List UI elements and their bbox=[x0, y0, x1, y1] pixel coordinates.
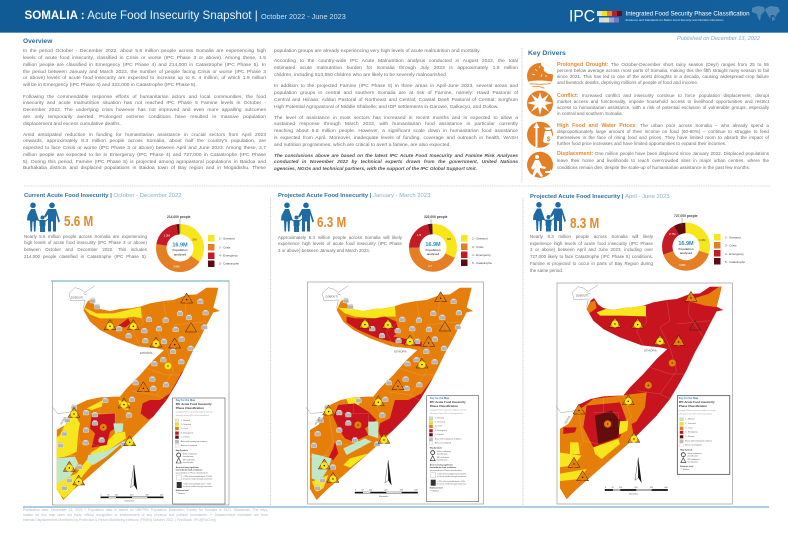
donut chart: current: 4 - Emergency bbox=[219, 254, 238, 258]
donut chart: current: 5M bbox=[192, 238, 197, 242]
map legend: january-march: of caloric needs through assistance bbox=[437, 475, 466, 478]
map legend: current: 4 - Emergency bbox=[181, 432, 193, 434]
overview paragraph 6: In addition to the projected Famine (IPC Phase 5) in three areas in April-June 2023, several areas and bbox=[274, 84, 518, 89]
map legend: january-march: Areas not analysed bbox=[435, 442, 451, 445]
donut chart: january-march bbox=[414, 215, 492, 268]
icon: drought bbox=[527, 63, 553, 89]
donut chart: current: 3.8M bbox=[173, 264, 180, 268]
overview paragraph 3: Amid anticipated reduction in funding for humanitarian assistance in crucial sectors from April 2023 bbox=[23, 133, 266, 138]
map legend: current: IDP settlement bbox=[183, 458, 196, 462]
map legend: april-june: IPC Acute Food Insecurity bbox=[679, 400, 715, 404]
overview conclusions bbox=[274, 154, 518, 172]
donut chart: april-june: 5 - Catastrophe bbox=[725, 260, 745, 264]
donut chart: april-june: 4.8M bbox=[679, 263, 686, 267]
donut chart: april-june bbox=[667, 214, 745, 267]
donut chart: january-march: 2 - Stressed bbox=[472, 236, 488, 240]
map legend: current: Key for the Map bbox=[176, 398, 196, 402]
map legend: april-june: (mapped Phase represents highest severity bbox=[679, 409, 715, 412]
map legend: april-june: classification bbox=[687, 455, 698, 458]
map legend: current: 2 - Stressed bbox=[181, 423, 191, 426]
map: january-march: DJIBOUTI bbox=[326, 295, 338, 299]
map legend: current: *** Medium bbox=[176, 493, 186, 495]
map legend: april-june: affecting at least 20% of the population) bbox=[679, 413, 712, 416]
donut chart: current bbox=[161, 215, 239, 268]
driver: conflict text: access to humanitarian assistance, with a risk of potential exclusion of vulnerable groups, especially bbox=[557, 105, 769, 110]
map legend: january-march: Evidence level bbox=[430, 488, 443, 490]
donut chart: january-march: 8M bbox=[447, 237, 452, 241]
map legend: january-march: (accounted for in Phase classification) bbox=[430, 469, 462, 472]
donut chart: january-march: Population bbox=[426, 248, 441, 252]
donut chart: january-march: 4.7 bbox=[428, 264, 432, 268]
map legend: april-june: Key for the Map bbox=[679, 396, 699, 400]
overview paragraph 1: or above) levels of acute food insecurity are expected to increase up to 6. 4 million, of which 1.9 million bbox=[23, 76, 266, 81]
map: april-june: DJIBOUTI bbox=[576, 294, 588, 298]
panel text: current: high levels of acute food insecurity (IPC Phase 3 or above) bbox=[24, 240, 147, 245]
panel text: current: between October and December 2022. This includes bbox=[24, 247, 147, 252]
map legend: january-march: of caloric needs through assistance bbox=[437, 483, 466, 486]
donut chart: january-march: 5 - Catastrophe bbox=[472, 261, 492, 265]
map legend: current: Phase Classification bbox=[176, 406, 204, 410]
driver: conflict text: market access and functionality, impede household access to livelihood opportunities and restrict bbox=[557, 99, 769, 104]
panel text: current bbox=[24, 234, 147, 259]
driver: prolonged drought text: and livestock deaths, depriving millions of people of food and income. bbox=[557, 80, 698, 85]
overview paragraph 1 bbox=[23, 48, 266, 88]
panel text: april-june: Nearly 8.3 million people across Somalia will likely bbox=[530, 234, 653, 239]
driver: prolonged drought text: Prolonged Drought: The October-December short rainy season (Deyr) ranges from 25 to 55 bbox=[557, 62, 769, 68]
IPC logo bbox=[569, 6, 780, 26]
map legend: april-june: 3 - Crisis bbox=[685, 427, 693, 430]
map legend: january-march: > 25% of households meet > 50% bbox=[437, 480, 465, 483]
map legend: current: of caloric needs through assistance bbox=[183, 485, 212, 488]
panel text: current: Nearly 5.6 million people across Somalia are experiencing bbox=[24, 234, 147, 238]
donut chart: april-june: 3 - Crisis bbox=[725, 244, 737, 248]
driver: conflict text: in central and southern Somalia. bbox=[557, 111, 623, 116]
overview conclusions: agencies, NGOs and technical partners, with the support of the IPC Global Support Unit. bbox=[274, 167, 477, 172]
overview paragraph 2: displacement and excess cumulative deaths. bbox=[23, 122, 121, 127]
overview paragraph 6: population groups in central and southern Somalia are at risk of Famine, namely: Hawd Pastoral of bbox=[274, 91, 518, 96]
donut chart: current: 2 - Stressed bbox=[219, 236, 235, 240]
donut chart: april-june: Population bbox=[679, 247, 694, 251]
panel text: april-june: 3 or above) between April and June 2023, including over bbox=[530, 247, 653, 252]
donut chart: current: 16.9M bbox=[172, 242, 188, 248]
donut chart: january-march: 4 - Emergency bbox=[472, 253, 491, 257]
IPC logo: Evidence and Standards for Better Food Security and Nutrition Decisions bbox=[626, 18, 724, 22]
footer rule bbox=[23, 506, 769, 508]
IPC logo: Integrated Food Security Phase Classification bbox=[626, 12, 750, 18]
map legend: april-june: Evidence level bbox=[680, 466, 694, 468]
icon: prices bbox=[527, 122, 554, 148]
map legend: current: Areas not analysed bbox=[181, 444, 197, 447]
overview paragraph 6: High Potential Agropastoral of Middle Shabelle; and IDP settlements in Garowe, Galkacyo, and Dollow. bbox=[274, 105, 498, 110]
map legend: current: IPC Acute Food Insecurity bbox=[176, 402, 212, 406]
donut chart: april-june: 3.3M bbox=[699, 238, 706, 242]
map legend: january-march: humanitarian food assistance bbox=[430, 466, 456, 469]
driver: prolonged drought text: since 2021. This has led to one of the worst droughts in a decade, causing widespread crop failure bbox=[557, 74, 769, 79]
overview paragraph 7: and nutrition programmes, which are critical to avert a famine, are also expected. bbox=[274, 143, 451, 148]
map legend: current: Evidence level bbox=[176, 490, 189, 492]
map legend: april-june: Areas with inadequate evidence bbox=[685, 440, 712, 443]
map legend: current: affecting at least 20% of the population) bbox=[176, 414, 209, 417]
header banner bbox=[0, 0, 788, 33]
donut chart: april-june: 2.7M bbox=[669, 232, 676, 236]
icon: prices: $ bbox=[547, 136, 551, 143]
panel text: april-june: Famine is projected to occur in parts of Bay Region during bbox=[530, 261, 653, 266]
driver: prolonged drought text bbox=[557, 62, 769, 85]
key drivers heading: Key Drivers bbox=[528, 50, 566, 57]
map legend: january-march: Urban settlement bbox=[437, 450, 452, 453]
map legend: january-march: > 25% of households meet 25-50% bbox=[437, 473, 467, 476]
donut chart: january-march: 16.9M bbox=[425, 242, 441, 248]
overview conclusions: The conclusions above are based on the latest IPC Acute Food Insecurity and Famine Risk Analyses bbox=[274, 154, 518, 159]
map frame: april-june bbox=[557, 283, 732, 504]
donut chart: current: 1.3M bbox=[164, 234, 171, 238]
panel text: january-march: 3 or above) between January and March 2023. bbox=[278, 248, 370, 253]
icon: displacement bbox=[527, 152, 553, 178]
panel 3 icon: family bbox=[533, 202, 566, 231]
donut chart: january-march: 3 - Crisis bbox=[472, 245, 484, 249]
overview paragraph 1: million people are classified in Emergency (IPC Phase 4) and 214,000 in Catastrophe (IPC Phase 5). In bbox=[23, 63, 266, 68]
panel text: january-march: experience high levels of acute food insecurity (IPC Phase bbox=[278, 241, 402, 246]
overview paragraph 3: Burhakaba districts and displaced populations in Baidoa town of Bay region and in Mogadishu. These bbox=[23, 166, 266, 171]
publication date: Published on December 13, 2022 bbox=[677, 36, 760, 42]
icon: conflict bbox=[527, 90, 553, 116]
map legend: current bbox=[173, 398, 225, 504]
overview paragraph 3: million people are expected to be in Emergency (IPC Phase 4) and 727,000 in Catastrophe (IPC Phase bbox=[23, 153, 266, 158]
overview paragraph 1: will be in Emergency (IPC Phase 4) and 322,000 in Catastrophe (IPC Phase 5). bbox=[23, 83, 197, 88]
map: april-june: KENYA bbox=[563, 415, 571, 424]
map legend: january-march: Area receiving significant bbox=[430, 464, 453, 467]
footnote: Internal Displacements Monitored by Protection & Return Monitoring Network (PRMN) October 2022. | Feedback: IPC@FAO.org bbox=[23, 518, 216, 522]
map legend: current: Area receiving significant bbox=[176, 466, 199, 469]
map: april-june bbox=[553, 284, 727, 504]
overview paragraph 3 bbox=[23, 132, 266, 171]
panel text: april-june: the same period. bbox=[530, 268, 563, 273]
section heading: april-june: Projected Acute Food Insecurity | April - June 2023 bbox=[530, 194, 670, 200]
donut chart: january-march: analysed bbox=[427, 252, 439, 256]
map legend: january-march bbox=[427, 396, 479, 502]
map legend: current: classification bbox=[183, 455, 193, 458]
driver: displacement text bbox=[557, 151, 769, 170]
map frame: current bbox=[51, 281, 229, 505]
driver: prices text: High Food and Water Prices: The urban poor across Somalia – who already spend a bbox=[557, 123, 769, 129]
map legend: april-june: Phase Classification bbox=[679, 404, 707, 408]
footnote bbox=[23, 508, 268, 522]
overview paragraph 2 bbox=[23, 94, 266, 127]
overview paragraph 3: onwards, approximately 8.3 million people across Somalia, about half the country's population, are bbox=[23, 139, 266, 144]
overview paragraph 7: is expected from April. Moreover, inadequate levels of funding, coverage and outreach in health, WASH bbox=[274, 136, 518, 141]
headline number: january-march: 6.3 M bbox=[317, 214, 346, 231]
overview paragraph 1: levels of acute food insecurity, classified in Crisis or worse (IPC Phase 3 or above). Among these, 1.5 bbox=[23, 56, 266, 61]
donut chart: current: Population bbox=[173, 248, 188, 252]
panel text: april-june: 727,000 likely to face Catastrophe (IPC Phase 5) conditions. bbox=[530, 254, 653, 259]
map legend: april-june: 4 - Emergency bbox=[685, 431, 698, 434]
overview paragraph 6 bbox=[274, 84, 518, 110]
map legend: january-march: (mapped Phase represents highest severity bbox=[430, 409, 466, 412]
map legend: current: of caloric needs through assistance bbox=[183, 478, 212, 480]
overview paragraph 2: December 2022. The underlying crisis however has not improved and even more appalling outcomes bbox=[23, 108, 266, 113]
map legend: april-june: IDP settlement bbox=[687, 458, 700, 461]
donut chart: april-june: 4 - Emergency bbox=[725, 252, 744, 256]
overview paragraph 7 bbox=[274, 116, 518, 148]
donut chart: january-march: 322,000 people bbox=[424, 215, 448, 219]
divider lines bbox=[24, 48, 770, 505]
footnote: Publication date: December 13, 2022 * Population data is based on UNFPA’s Population Estimation Survey for Somalia in 2021. Disclaimer: The infor- bbox=[23, 508, 268, 512]
map legend: current: > 25% of households meet > 50% bbox=[183, 482, 211, 486]
panel 2 icon: family bbox=[281, 202, 314, 232]
map: january-march: ETHIOPIA bbox=[394, 350, 407, 354]
driver: conflict text: Conflict: Increased conflict and insecurity continue to force population displacement, disrupt bbox=[557, 93, 769, 99]
driver: prices text: themselves in the face of rising food and prices. They have limited room to absorb the impact of bbox=[557, 135, 769, 140]
map legend: january-march: Map Symbols bbox=[430, 448, 442, 450]
IPC logo: IPC bbox=[569, 6, 595, 26]
map legend: april-june: classification bbox=[687, 461, 698, 464]
map legend: january-march: 3 - Crisis bbox=[435, 425, 442, 428]
overview paragraph 7: reaching about 5.8 million people. However, a significant scale down in humanitarian food assistance bbox=[274, 129, 518, 134]
driver: displacement text: conditions remain dire, despite the scale-up of humanitarian assistance in the past few months. bbox=[557, 165, 750, 170]
map legend: april-june: 2 - Stressed bbox=[685, 422, 696, 425]
map legend: april-june: *** Medium bbox=[680, 469, 690, 471]
donut chart: january-march: 1.9 bbox=[417, 233, 421, 237]
map: april-june: ETHIOPIA bbox=[644, 349, 657, 353]
map: current: ETHIOPIA bbox=[140, 351, 153, 355]
overview paragraph 5 bbox=[274, 58, 518, 78]
overview conclusions: conducted in November 2022 by technical experts drawn from the government, United Nations bbox=[274, 160, 518, 165]
map legend: january-march: classification bbox=[437, 453, 447, 456]
overview heading: Overview bbox=[23, 38, 52, 45]
panel text: april-june bbox=[530, 234, 653, 273]
map legend: january-march: 5 - Famine bbox=[435, 434, 444, 436]
title: SOMALIA : Acute Food Insecurity Snapshot | October 2022 - June 2023 bbox=[24, 9, 346, 22]
map legend: current: Areas with inadequate evidence bbox=[181, 440, 208, 443]
footnote: mation on this map does not imply official recognition or endorsement of any physical and political boundaries. ** Displacement estimates are from bbox=[23, 513, 268, 517]
map legend: january-march: IDP settlement bbox=[437, 456, 450, 459]
overview paragraph 3: 5). During this period, Famine (IPC Phase 5) is projected among agropastoral populations in Baidoa and bbox=[23, 160, 266, 165]
map legend: april-june: Areas not analysed bbox=[685, 444, 701, 447]
map legend: current: 3 - Crisis bbox=[181, 427, 188, 430]
overview paragraph 2: are only temporarily averted. Prolonged extreme conditions have resulted in massive population bbox=[23, 115, 266, 120]
overview paragraph 2: Following the commendable response efforts of humanitarian actors and local communities, the food bbox=[23, 95, 266, 100]
headline number: april-june: 8.3 M bbox=[570, 215, 599, 232]
map legend: january-march: 2 - Stressed bbox=[435, 421, 445, 424]
map legend: april-june: Urban settlement bbox=[687, 452, 702, 455]
map: current: DJIBOUTI bbox=[71, 295, 83, 299]
overview paragraph 3: expected to face Crisis or worse (IPC Phase 3 or above) between April and June 2023. Among these, 2.7 bbox=[23, 146, 266, 151]
overview paragraph 6: Central and Hiiraan; Addun Pastoral of Northeast and Central; Coastal Deeh Pastoral of Central; Sorghum bbox=[274, 98, 518, 103]
map legend: january-march: 1 - Minimal bbox=[435, 418, 445, 420]
driver: prices text: further food price increases and have limited opportunities to expand their incomes. bbox=[557, 141, 726, 146]
donut chart: current: analysed bbox=[174, 252, 186, 256]
donut chart: april-june: 2 - Stressed bbox=[725, 236, 741, 240]
headline number: current: 5.6 M bbox=[64, 213, 93, 230]
driver: prolonged drought text: percent below average across most parts of Somalia, making this the fifth straight rainy season to fail bbox=[557, 68, 769, 73]
map legend: current: 5 - Famine bbox=[181, 436, 190, 438]
map legend: current: 1 - Minimal bbox=[181, 420, 191, 422]
donut chart: april-june: 727,000 people bbox=[674, 214, 698, 218]
map legend: january-march: classification bbox=[437, 459, 447, 462]
map legend: current: classification bbox=[183, 461, 193, 464]
driver: displacement text: leave their home and livelihoods to reach overcrowded sites in major urban centres, where the bbox=[557, 158, 769, 163]
panel 1 icon: family bbox=[27, 202, 60, 232]
map legend: april-june: 5 - Famine bbox=[685, 436, 694, 438]
map frame: january-march bbox=[308, 282, 484, 504]
driver: conflict text bbox=[557, 93, 769, 116]
overview paragraph 5: children, including 513,550 children who are likely to be severely malnourished. bbox=[274, 73, 447, 78]
map legend: current: (accounted for in Phase classification) bbox=[176, 472, 208, 474]
overview paragraph 5: According to the country-wide IPC Acute Malnutrition analysis conducted in August 2022, the total bbox=[274, 59, 518, 64]
donut chart: april-june: 16.9M bbox=[678, 241, 694, 247]
donut chart: current: 3 - Crisis bbox=[219, 246, 231, 250]
overview paragraph 4: population groups are already experiencing very high levels of acute malnutrition and mortality. bbox=[274, 49, 481, 54]
panel text: january-march bbox=[278, 234, 402, 253]
overview paragraph 1: In the period October - December 2022, about 5.6 million people across Somalia are experiencing high bbox=[23, 49, 266, 54]
section heading: current: Current Acute Food Insecurity | October - December 2022 bbox=[24, 193, 182, 199]
section heading: january-march: Projected Acute Food Insecurity | January - March 2023 bbox=[278, 193, 430, 199]
map legend: current: (mapped Phase represents highest severity bbox=[176, 410, 212, 414]
map legend: current: > 25% of households meet 25-50% bbox=[183, 475, 213, 478]
map legend: current: Urban settlement bbox=[183, 452, 198, 456]
donut chart: april-june: analysed bbox=[680, 251, 692, 255]
map legend: current: Map Symbols bbox=[176, 450, 188, 452]
overview paragraph 2: insecurity and acute malnutrition situation has not reached IPC Phase 5 Famine levels in October - bbox=[23, 101, 266, 106]
map legend: january-march: 4 - Emergency bbox=[435, 429, 447, 432]
driver: prices text bbox=[557, 123, 769, 146]
panel text: january-march: Approximately 6.3 million people across Somalia will likely bbox=[278, 234, 402, 240]
map: january-march: KENYA bbox=[313, 416, 321, 425]
map legend: january-march: IPC Acute Food Insecurity bbox=[430, 400, 466, 404]
overview paragraph 7: sustained response through March 2023, with humanitarian food assistance in particular currently bbox=[274, 122, 518, 127]
map legend: january-march: Phase Classification bbox=[430, 404, 458, 408]
map legend: january-march: Key for the Map bbox=[430, 396, 450, 400]
donut chart: current: 5 - Catastrophe bbox=[219, 262, 239, 266]
map legend: january-march: *** Medium bbox=[430, 491, 440, 493]
donut chart: current: 214,000 people bbox=[167, 215, 191, 219]
map: january-march bbox=[303, 285, 477, 505]
map: current: KENYA bbox=[59, 416, 67, 425]
map legend: january-march: Areas with inadequate evidence bbox=[435, 438, 462, 441]
map legend: current: humanitarian food assistance bbox=[176, 468, 202, 472]
overview paragraph 7: The level of assistance in most sectors has increased in recent months and is expected to allow a bbox=[274, 116, 518, 121]
map legend: april-june: Map Symbols bbox=[680, 450, 692, 452]
driver: prices text: disproportionately large amount of their income on food (60-80%) – continue to struggle to feed bbox=[557, 129, 769, 134]
map legend: january-march: affecting at least 20% of the population) bbox=[430, 412, 463, 415]
panel text: current: 214,000 people classified in Catastrophe (IPC Phase 5). bbox=[24, 254, 147, 259]
panel text: april-june: experience high levels of acute food insecurity (IPC Phase bbox=[530, 241, 653, 246]
map: current bbox=[50, 285, 223, 505]
map legend: april-june bbox=[677, 396, 730, 474]
driver: displacement text: Displacement: One million people have been displaced since January 2022. Displaced populations bbox=[557, 151, 769, 157]
map legend: april-june: 1 - Minimal bbox=[685, 419, 695, 421]
overview paragraph 1: the period between January and March 2023, the number of people facing Crisis or worse (IPC Phase 3 bbox=[23, 70, 266, 75]
overview paragraph 5: estimated acute malnutrition burden for Somalia through July 2023 is approximately 1.8 million bbox=[274, 66, 518, 71]
